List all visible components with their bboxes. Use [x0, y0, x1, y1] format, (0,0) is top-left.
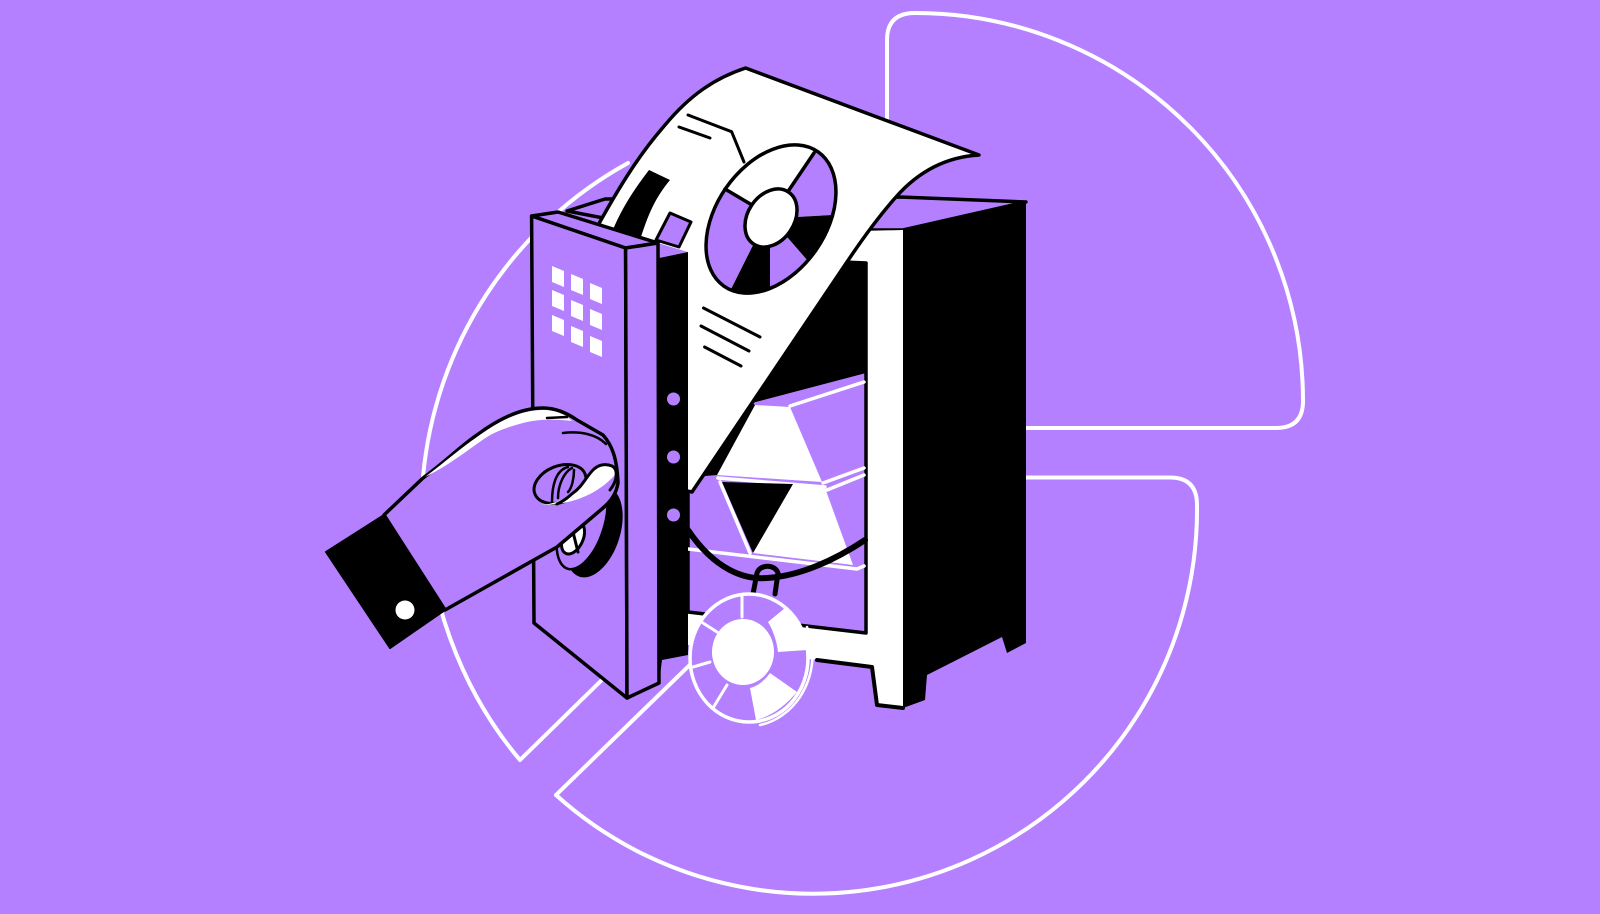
pie chart outline: top right segment	[887, 13, 1303, 428]
purple wedge 1	[790, 152, 834, 217]
sheet outline	[590, 68, 979, 492]
keypad keys	[552, 266, 602, 357]
donut chart on sheet	[704, 143, 838, 295]
safe interior	[688, 255, 866, 633]
interior upper shadow	[688, 255, 866, 490]
lower bar edge lines	[688, 482, 864, 569]
clasp	[753, 566, 778, 594]
coin body	[690, 594, 808, 722]
post hole 2	[667, 450, 680, 464]
black bar face	[722, 482, 793, 553]
top bar white face	[717, 405, 822, 482]
dial through fingers	[528, 457, 592, 511]
safe door	[532, 212, 659, 698]
cuff	[326, 515, 445, 648]
door keypad	[552, 266, 602, 357]
dial knob bar	[572, 528, 578, 552]
post hole 3	[667, 508, 680, 522]
hinge post with holes	[658, 243, 688, 683]
black bar	[612, 170, 670, 240]
coin outer rim	[760, 627, 812, 725]
coin centre	[712, 619, 774, 685]
text lines top	[679, 115, 744, 162]
donut wedges	[708, 152, 834, 292]
safe bottom edge line	[817, 660, 903, 708]
gold bars	[688, 382, 864, 569]
small wedge at the lower bar	[858, 566, 859, 567]
dial detail lines	[552, 467, 574, 502]
cuff button	[396, 600, 414, 620]
door front face	[532, 216, 627, 698]
thumb outline	[557, 465, 616, 504]
hand turning dial	[326, 408, 618, 648]
shadow wedge left of top bar	[703, 404, 755, 478]
dial purple face	[547, 473, 617, 575]
door dial	[547, 473, 633, 585]
coin with clasp	[690, 566, 812, 725]
donut spokes	[725, 153, 814, 205]
safe white front frame	[688, 230, 903, 708]
safe top face	[567, 197, 1026, 230]
lower bar white face	[753, 484, 853, 565]
gap ellipse	[528, 457, 592, 511]
small purple bar	[656, 213, 691, 247]
thumb	[541, 465, 615, 505]
dial small knob	[557, 518, 589, 558]
black wedge 2	[731, 246, 770, 292]
donut centre	[734, 179, 808, 257]
hand shape	[384, 408, 618, 610]
finger creases	[547, 417, 606, 444]
black wedge 1	[788, 215, 831, 260]
text lines bottom	[701, 308, 760, 366]
purple wedge 2	[770, 238, 806, 286]
pie chart outline: left segment	[423, 163, 628, 760]
illustration: hand opening a safe holding a report	[325, 11, 1305, 896]
coin wedge bottom	[750, 673, 797, 720]
safe cabinet	[567, 197, 1026, 708]
black post	[659, 252, 688, 683]
donut outer ring	[679, 120, 863, 318]
post hole 1	[667, 392, 680, 406]
pie chart outline: bottom right segment	[556, 478, 1197, 894]
safe side panel	[903, 202, 1026, 708]
purple wedge 3	[708, 192, 753, 288]
financial report sheet	[590, 68, 979, 492]
donut base	[679, 120, 863, 318]
coin wedge top	[768, 608, 807, 652]
dial black crescent	[555, 479, 633, 585]
door side face	[626, 243, 659, 698]
door top face	[532, 212, 658, 248]
necklace chain	[688, 530, 865, 578]
top bar edge lines	[718, 382, 864, 490]
hand highlight	[425, 410, 572, 477]
purple sliver atop post	[658, 243, 688, 258]
coin ticks	[693, 595, 742, 708]
